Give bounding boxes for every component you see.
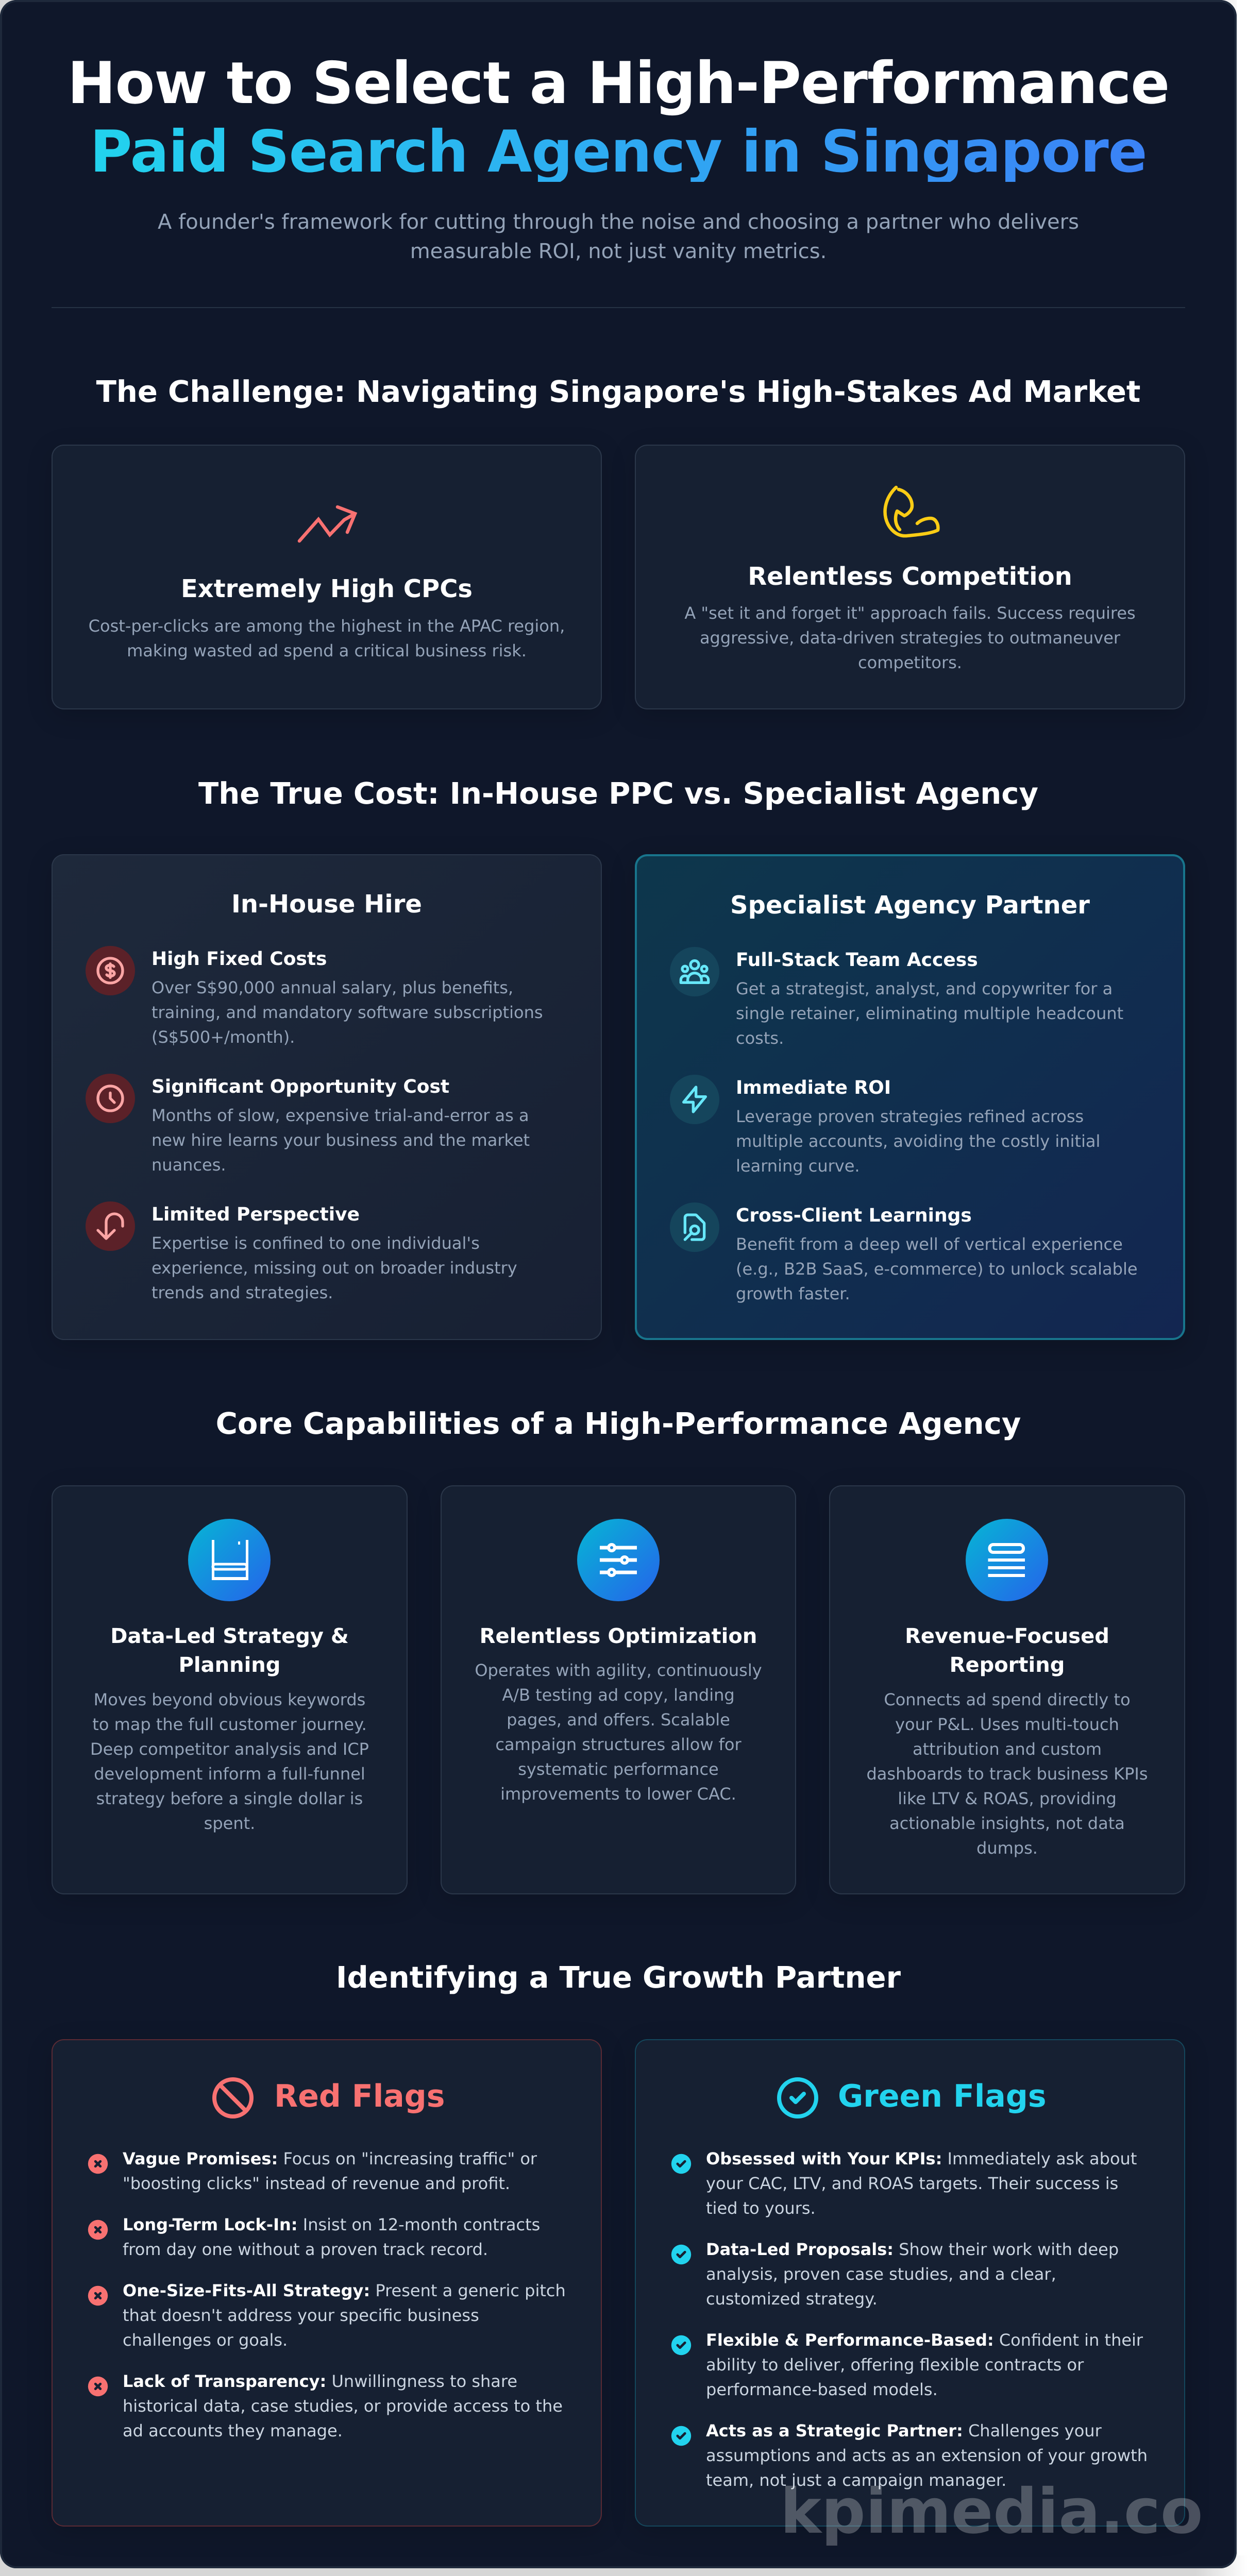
card text: your P&L. Uses multi-touch (895, 1715, 1119, 1734)
item text: costs. (736, 1028, 784, 1048)
card text: A/B testing ad copy, landing (502, 1685, 735, 1705)
card title (110, 1624, 349, 1677)
title (68, 50, 1169, 185)
red flag text (123, 2149, 537, 2193)
card text: Moves beyond obvious keywords (94, 1690, 365, 1709)
item text (736, 1107, 1100, 1176)
green flag text: ability to deliver, offering flexible contracts or (706, 2355, 1084, 2375)
card title: Relentless Competition (748, 562, 1072, 591)
icon: yellow swirl (883, 485, 940, 538)
panel: specialist agency partner (635, 854, 1185, 1340)
watermark: kpimedia.co (780, 2476, 1203, 2548)
red flag text: "boosting clicks" instead of revenue and profit. (123, 2174, 510, 2193)
green flag text: tied to yours. (706, 2198, 816, 2218)
heading: the true cost: The True Cost: In-House PPC vs. Specialist Agency (198, 776, 1038, 811)
card text: systematic performance (518, 1759, 719, 1779)
item text: new hire learns your business and the market (151, 1130, 530, 1150)
item text: single retainer, eliminating multiple headcount (736, 1004, 1123, 1023)
panel: relentless competition (635, 445, 1185, 709)
card title: Relentless Optimization (480, 1624, 757, 1648)
card text: Connects ad spend directly to (884, 1690, 1131, 1709)
bullet (88, 2285, 108, 2306)
green flag text: Obsessed with Your KPIs: Immediately ask about (706, 2149, 1137, 2168)
item title: Full-Stack Team Access (736, 950, 978, 971)
icon: trending up arrow (298, 505, 358, 543)
red flags heading: Red Flags (274, 2078, 445, 2114)
card text (866, 1690, 1148, 1858)
icon: strategy (188, 1519, 271, 1601)
icon: document search (670, 1202, 719, 1252)
card text: A "set it and forget it" approach fails. Success requires (684, 603, 1136, 623)
red flag text: Long-Term Lock-In: Insist on 12-month contracts (123, 2215, 540, 2234)
subtitle: A founder's framework for cutting through the noise and choosing a partner who delivers (158, 210, 1079, 234)
card text: actionable insights, not data (889, 1814, 1125, 1833)
green flags heading: Green Flags (838, 2078, 1047, 2114)
card title: Planning (179, 1653, 280, 1677)
panel: data-led strategy (52, 1485, 408, 1894)
card text (475, 1660, 762, 1804)
subtitle: measurable ROI, not just vanity metrics. (410, 240, 827, 263)
panel: revenue-focused reporting (829, 1485, 1185, 1894)
item text: Get a strategist, analyst, and copywriter for a (736, 979, 1113, 998)
card text: Operates with agility, continuously (475, 1660, 762, 1680)
green flag text (706, 2237, 1119, 2311)
red flag text: that doesn't address your specific business (123, 2306, 479, 2325)
card text: spent. (204, 1814, 255, 1833)
card text: dashboards to track business KPIs (866, 1764, 1148, 1784)
item text: (S$500+/month). (151, 1027, 295, 1047)
item text: (e.g., B2B SaaS, e-commerce) to unlock scalable (736, 1259, 1138, 1279)
heading: the challenge: The Challenge: Navigating Singapore's High-Stakes Ad Market (96, 375, 1140, 409)
heading: core capabilities: Core Capabilities of a High-Performance Agency (216, 1406, 1021, 1441)
red flag text (123, 2369, 563, 2443)
item text: Over S$90,000 annual salary, plus benefits, (151, 978, 513, 997)
card text: strategy before a single dollar is (96, 1789, 363, 1808)
heading: true growth partner: Identifying a True Growth Partner (336, 1960, 901, 1995)
red flag text: Lack of Transparency: Unwillingness to share (123, 2371, 517, 2391)
card text: dumps. (976, 1838, 1038, 1858)
card text: pages, and offers. Scalable (507, 1710, 730, 1730)
icon: team (670, 947, 719, 996)
icon: clock (86, 1074, 135, 1123)
bullet (88, 2219, 108, 2240)
item title: High Fixed Costs (151, 948, 327, 970)
panel: relentless optimization (441, 1485, 796, 1894)
item text (151, 1106, 530, 1175)
panel: green flags (635, 2039, 1185, 2527)
item text: growth faster. (736, 1284, 850, 1303)
item text (151, 1233, 517, 1302)
green flag text: performance-based models. (706, 2380, 938, 2399)
card text (89, 616, 565, 660)
red flag text: challenges or goals. (123, 2330, 288, 2350)
item text: Leverage proven strategies refined across (736, 1107, 1084, 1126)
item text: learning curve. (736, 1156, 860, 1176)
green flag text (706, 2418, 1148, 2493)
red flag text (123, 2278, 566, 2352)
card text: competitors. (858, 653, 962, 672)
card title: Data-Led Strategy & (110, 1624, 349, 1648)
item text (736, 1234, 1138, 1303)
item title: Significant Opportunity Cost (151, 1076, 449, 1097)
card text: Cost-per-clicks are among the highest in the APAC region, (89, 616, 565, 636)
item text: multiple accounts, avoiding the costly initial (736, 1131, 1100, 1151)
item title: Limited Perspective (151, 1204, 360, 1225)
panel: extremely high CPCs (52, 445, 602, 709)
card text: attribution and custom (913, 1739, 1102, 1759)
red flag text: historical data, case studies, or provide access to the (123, 2396, 563, 2416)
item text: nuances. (151, 1155, 226, 1175)
panel title: Specialist Agency Partner (730, 891, 1090, 920)
bullet (669, 2424, 694, 2448)
item text (736, 979, 1123, 1048)
card text: making wasted ad spend a critical business risk. (127, 641, 527, 660)
bullet (669, 2242, 694, 2267)
item text: Expertise is confined to one individual's (151, 1233, 480, 1253)
red flag text: ad accounts they manage. (123, 2421, 343, 2441)
panel: in-house hire (52, 854, 602, 1340)
icon: dollar (86, 946, 135, 995)
icon: ban (212, 2077, 254, 2119)
item title: Cross-Client Learnings (736, 1205, 972, 1226)
red flag text: Vague Promises: Focus on "increasing traffic" or (123, 2149, 537, 2168)
green flag text: Data-Led Proposals: Show their work with deep (706, 2240, 1119, 2259)
card text: campaign structures allow for (495, 1735, 742, 1754)
icon: reply arrow (86, 1201, 135, 1251)
item title: Immediate ROI (736, 1077, 891, 1098)
card text: aggressive, data-driven strategies to outmaneuver (700, 628, 1120, 648)
subtitle (158, 210, 1079, 263)
red flag text: from day one without a proven track record. (123, 2240, 488, 2259)
title line 2 gradient: Paid Search Agency in Singapore (90, 118, 1147, 185)
green flag text: analysis, proven case studies, and a clear, (706, 2264, 1056, 2284)
card text: Deep competitor analysis and ICP (90, 1739, 369, 1759)
icon: report (966, 1519, 1048, 1601)
item text: experience, missing out on broader industry (151, 1258, 517, 1278)
icon: sliders (577, 1519, 660, 1601)
item text: Months of slow, expensive trial-and-error as a (151, 1106, 529, 1125)
card text: like LTV & ROAS, providing (898, 1789, 1117, 1808)
bullet (86, 2374, 110, 2399)
bullet (669, 2333, 694, 2358)
card text: development inform a full-funnel (94, 1764, 365, 1784)
red flag text (123, 2215, 540, 2259)
icon: check circle (773, 2073, 822, 2123)
green flag text (706, 2328, 1143, 2402)
item text (151, 978, 543, 1047)
bullet (669, 2151, 694, 2176)
green flag text: customized strategy. (706, 2289, 878, 2309)
green flag text: Acts as a Strategic Partner: Challenges your (706, 2421, 1102, 2441)
title line 1: How to Select a High-Performance (68, 50, 1169, 117)
item text: Benefit from a deep well of vertical experience (736, 1234, 1123, 1254)
card text (684, 603, 1136, 672)
card title (905, 1624, 1109, 1677)
item text: trends and strategies. (151, 1283, 333, 1302)
red flag text: One-Size-Fits-All Strategy: Present a generic pitch (123, 2281, 566, 2300)
card text (90, 1690, 369, 1833)
green flag text: team, not just a campaign manager. (706, 2470, 1006, 2490)
card title: Revenue-Focused (905, 1624, 1109, 1648)
green flag text (706, 2146, 1137, 2221)
green flag text: assumptions and acts as an extension of your growth (706, 2446, 1148, 2465)
card title: Extremely High CPCs (181, 574, 473, 603)
green flag text: your CAC, LTV, and ROAS targets. Their success is (706, 2174, 1118, 2193)
panel title: In-House Hire (231, 890, 422, 919)
panel: red flags (52, 2039, 602, 2527)
bullet (88, 2154, 108, 2174)
card text: to map the full customer journey. (92, 1715, 367, 1734)
icon: lightning (670, 1075, 719, 1124)
green flag text: Flexible & Performance-Based: Confident in their (706, 2330, 1143, 2350)
card title: Reporting (950, 1653, 1065, 1677)
card text: improvements to lower CAC. (500, 1784, 736, 1804)
item text: training, and mandatory software subscriptions (151, 1003, 543, 1022)
